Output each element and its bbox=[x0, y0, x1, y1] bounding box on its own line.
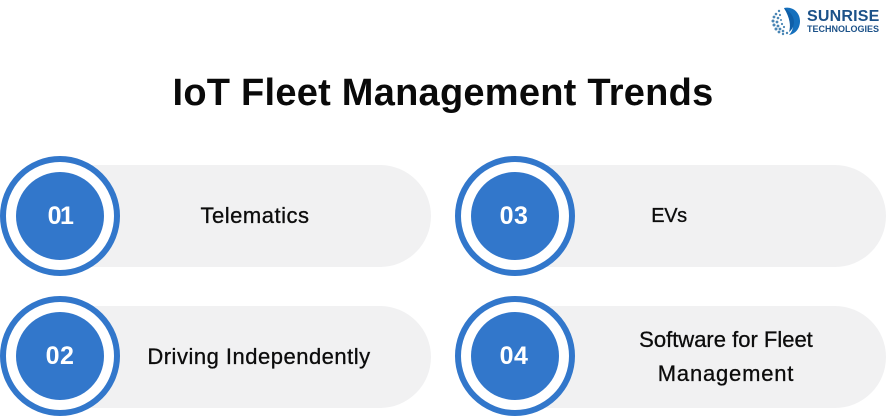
panel: 02 Driving Independently bbox=[0, 296, 431, 416]
logo name: SUNRISE bbox=[807, 8, 880, 25]
pill background bbox=[515, 165, 886, 267]
title: IoT Fleet Management Trends bbox=[173, 72, 713, 114]
number badge 04 bbox=[455, 296, 575, 416]
number badge 04: 04 bbox=[500, 342, 528, 370]
label: Telematics bbox=[201, 203, 309, 228]
pill background bbox=[60, 165, 431, 267]
label: EVs bbox=[651, 205, 687, 227]
number badge 02 bbox=[0, 296, 120, 416]
number badge 03 bbox=[455, 156, 575, 276]
label: Software for Fleet bbox=[639, 327, 813, 352]
number badge 02: 02 bbox=[46, 342, 74, 370]
icon: logo swirl bbox=[772, 8, 800, 36]
logo: Sunrise Technologies bbox=[772, 8, 880, 36]
pill background bbox=[515, 306, 886, 408]
number badge 01 bbox=[0, 156, 120, 276]
panel: 01 Telematics bbox=[0, 156, 431, 276]
number badge 01: 01 bbox=[48, 202, 72, 230]
panel: 03 EVs bbox=[455, 156, 886, 276]
logo tagline: TECHNOLOGIES bbox=[807, 24, 879, 34]
label: Driving Independently bbox=[147, 344, 371, 369]
label bbox=[639, 327, 813, 386]
label: Management bbox=[658, 361, 794, 386]
number badge 03: 03 bbox=[500, 202, 528, 230]
panel: 04 Software for Fleet Management bbox=[455, 296, 886, 416]
pill background bbox=[60, 306, 431, 408]
